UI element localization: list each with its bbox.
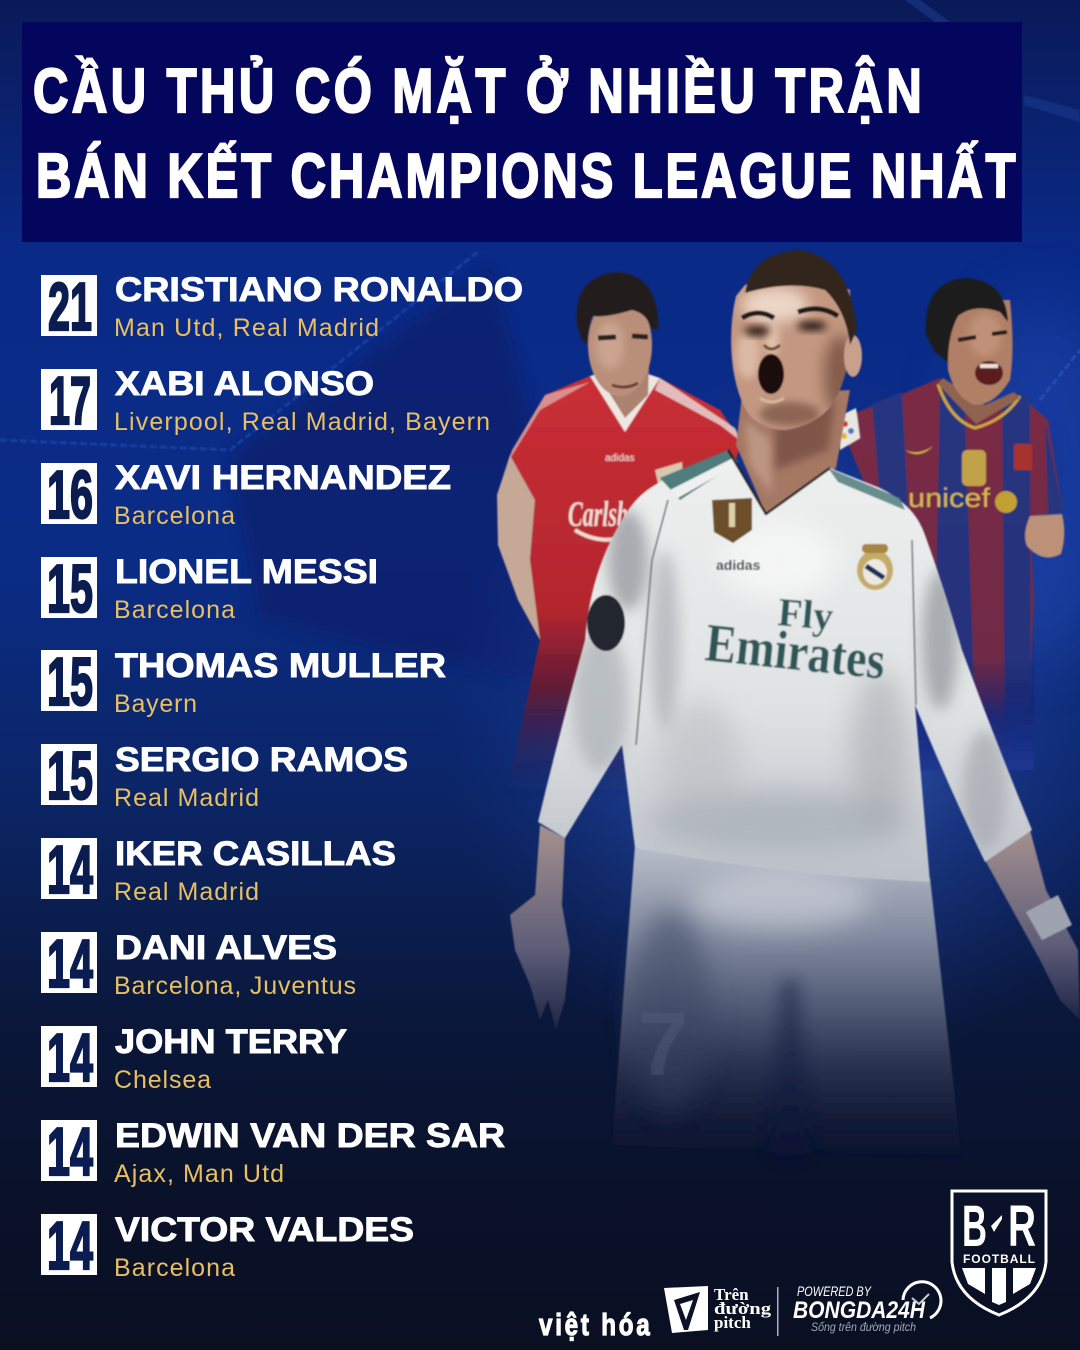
Ronaldo neck: [736, 390, 850, 514]
row 1: Ronaldo: 21: [48, 269, 92, 345]
title panel: [22, 22, 1022, 242]
row 11: Valdes: Barcelona: [114, 1254, 235, 1282]
row 2: Alonso: 17: [49, 363, 91, 439]
row 1: Ronaldo: [41, 269, 523, 345]
row 4: Messi: LIONEL MESSI: [115, 553, 378, 591]
row 10: Van der Sar: EDWIN VAN DER SAR: [115, 1117, 505, 1155]
row 10: Van der Sar: Ajax, Man Utd: [114, 1160, 284, 1188]
row 5: Muller: [41, 644, 446, 720]
title line 2: BÁN KẾT CHAMPIONS LEAGUE NHẤT: [36, 140, 1016, 210]
row 7: Casillas: [41, 832, 396, 908]
row 8: Alves: Barcelona, Juventus: [114, 972, 356, 1000]
row 10: Van der Sar: [41, 1114, 505, 1190]
title line 1: CẦU THỦ CÓ MẶT Ở NHIỀU TRẬN: [33, 55, 922, 125]
logo: Trên đường pitch: đường: [714, 1299, 772, 1318]
row 3: Xavi: [41, 457, 451, 533]
divider: [777, 1287, 778, 1336]
row 11: Valdes: VICTOR VALDES: [115, 1211, 414, 1249]
logo: B/R Football shield: B: [962, 1194, 987, 1259]
Ronaldo shirt: [538, 450, 1032, 882]
credit: việt hóa: việt hóa: [539, 1307, 650, 1342]
row 8: Alves: DANI ALVES: [115, 929, 337, 967]
logo: Trên đường pitch: pitch: [714, 1313, 751, 1332]
logo: Bongda24h: [793, 1282, 941, 1334]
row 9: Terry: JOHN TERRY: [115, 1023, 347, 1061]
Ronaldo crest: [857, 544, 893, 590]
Ronaldo sponsor text: [703, 557, 888, 691]
player photo: Cristiano Ronaldo: [510, 250, 1080, 1160]
row 2: Alonso: Liverpool, Real Madrid, Bayern: [114, 408, 490, 436]
La Liga sleeve badge: [836, 408, 860, 450]
row 11: Valdes: 14: [47, 1208, 93, 1284]
logo: B/R Football shield: R: [1008, 1194, 1036, 1259]
logo: Trên đường pitch: Trên: [714, 1285, 749, 1304]
logo: Trên đường pitch: [664, 1285, 772, 1333]
row 7: Casillas: IKER CASILLAS: [115, 835, 396, 873]
row 8: Alves: [41, 926, 356, 1002]
row 1: Ronaldo: CRISTIANO RONALDO: [115, 271, 523, 309]
ranking list: [41, 269, 523, 1284]
logo: Bongda24h: BONGDA24H: [793, 1297, 926, 1324]
Ronaldo hair: [745, 250, 857, 345]
Alonso shirt text: adidas: [605, 453, 634, 464]
row 7: Casillas: Real Madrid: [114, 878, 259, 906]
row 6: Ramos: 15: [47, 738, 93, 814]
logo: B/R Football shield: [952, 1191, 1046, 1315]
row 6: Ramos: [41, 738, 408, 814]
Ronaldo sponsor text: adidas: [716, 557, 761, 573]
logo: Bongda24h: POWERED BY: [797, 1283, 872, 1299]
row 4: Messi: 15: [47, 551, 93, 627]
row 4: Messi: [41, 551, 378, 627]
Ronaldo sponsor text: Fly: [776, 589, 835, 639]
row 2: Alonso: [41, 363, 490, 439]
row 9: Terry: 14: [47, 1020, 93, 1096]
logo: B/R Football shield: FOOTBALL: [963, 1252, 1035, 1266]
row 6: Ramos: Real Madrid: [114, 784, 259, 812]
row 4: Messi: Barcelona: [114, 596, 235, 624]
Alonso shirt text: Carlsb: [568, 494, 628, 534]
row 9: Terry: [41, 1020, 347, 1096]
row 7: Casillas: 14: [47, 832, 93, 908]
Ronaldo head: [731, 250, 862, 430]
row 5: Muller: THOMAS MULLER: [115, 647, 446, 685]
Ronaldo UCL patch: [587, 595, 625, 651]
row 5: Muller: Bayern: [114, 690, 197, 718]
row 9: Terry: Chelsea: [114, 1066, 211, 1094]
Xavi shirt text: unicef: [908, 483, 991, 513]
row 2: Alonso: XABI ALONSO: [115, 365, 374, 403]
row 3: Xavi: XAVI HERNANDEZ: [115, 459, 451, 497]
Ronaldo sponsor text: Emirates: [703, 612, 888, 691]
row 11: Valdes: [41, 1208, 414, 1284]
Alonso shirt text: [568, 453, 684, 540]
logo: Bongda24h: Sống trên đường pitch: [811, 1322, 916, 1334]
player photo: Xabi Alonso: [497, 272, 742, 800]
Ronaldo right forearm: [985, 830, 1080, 1020]
Ronaldo shorts: 7: [638, 995, 688, 1095]
Ronaldo FIFA badge: [712, 498, 752, 543]
row 6: Ramos: SERGIO RAMOS: [115, 741, 408, 779]
Ronaldo shorts: [612, 845, 962, 1160]
player photo: Xavi Hernandez: [836, 278, 1064, 770]
row 3: Xavi: Barcelona: [114, 502, 235, 530]
row 10: Van der Sar: 14: [47, 1114, 93, 1190]
row 8: Alves: 14: [47, 926, 93, 1002]
row 3: Xavi: 16: [47, 457, 93, 533]
row 5: Muller: 15: [47, 644, 93, 720]
Ronaldo left forearm: [510, 825, 570, 1030]
row 1: Ronaldo: Man Utd, Real Madrid: [114, 314, 379, 342]
